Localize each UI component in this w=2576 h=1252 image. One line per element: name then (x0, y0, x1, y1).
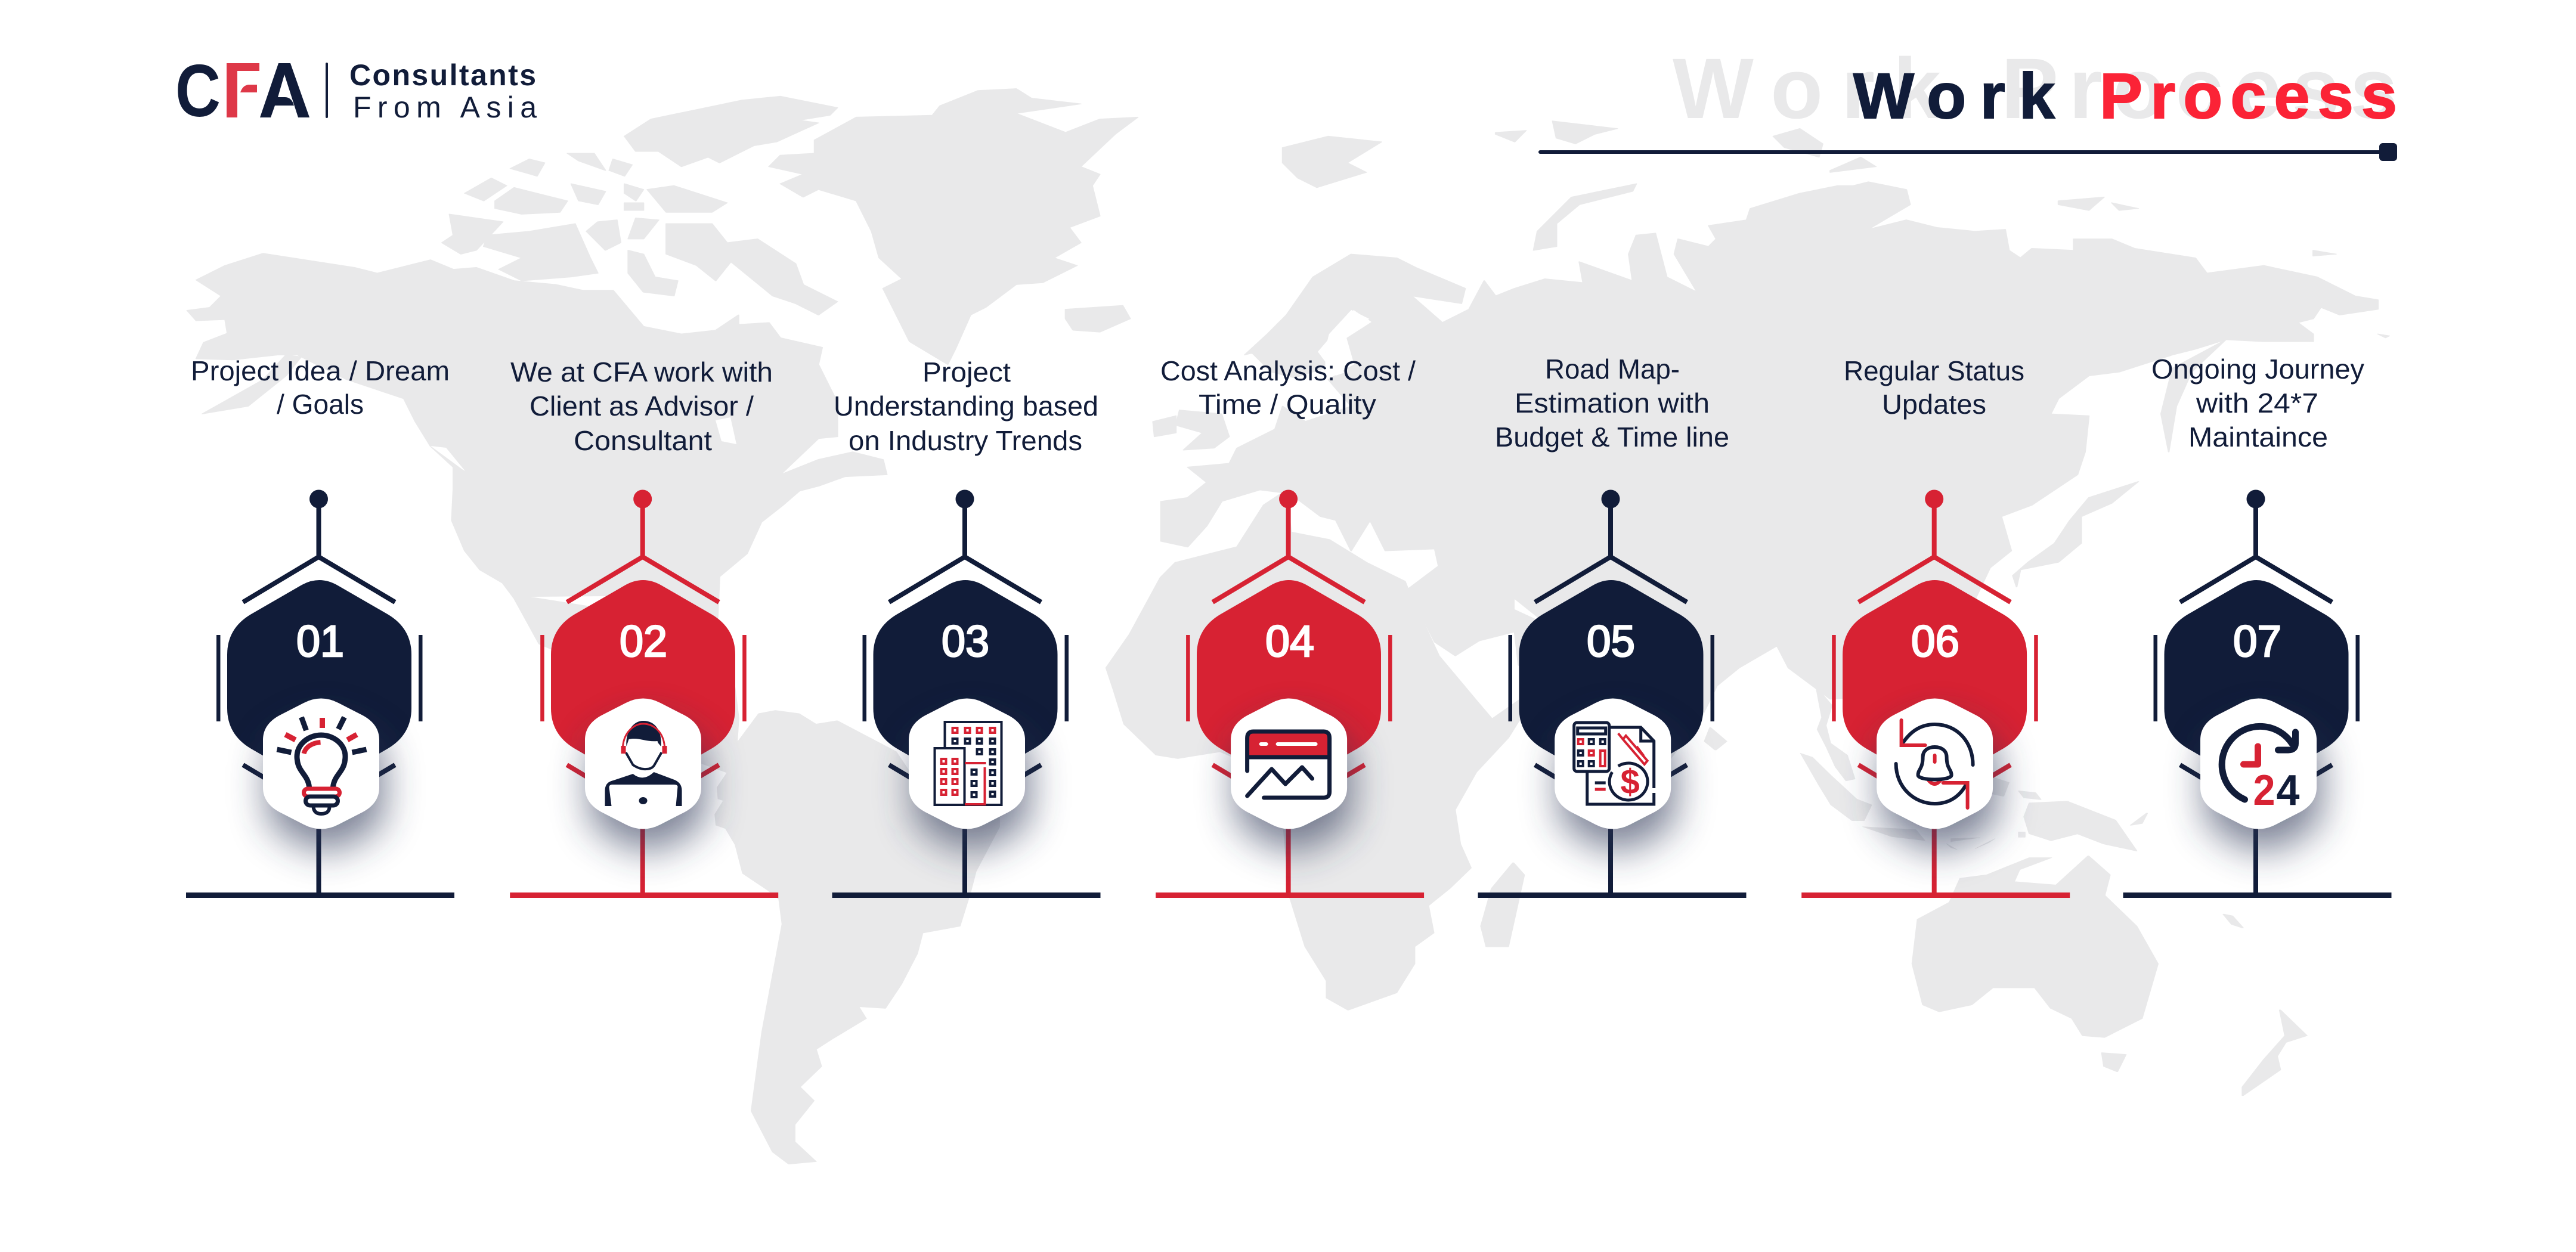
hexagon shadow 05 (1559, 720, 1676, 851)
caption 05: Road Map- (1545, 354, 1680, 385)
white icon hexagon 06 (1877, 699, 1993, 829)
caption 01: Project Idea / Dream (191, 355, 450, 386)
connector frame 07 (2123, 490, 2391, 898)
caption 01 (191, 355, 450, 420)
connector frame 06 (1801, 490, 2070, 898)
icon: calculator and budget sheet (1574, 723, 1654, 804)
hexagon shadow 07 (2205, 720, 2321, 851)
hexagon 06 (1843, 580, 2027, 783)
caption 03: Understanding based (834, 391, 1098, 422)
hexagon shadow 02 (590, 720, 706, 851)
logo wordmark CFA (175, 50, 309, 132)
hexagon shadow 04 (1236, 720, 1352, 851)
number 01: 01 (296, 616, 344, 666)
caption 01: / Goals (277, 389, 364, 420)
caption 02: We at CFA work with (510, 357, 773, 388)
icon: office buildings (935, 722, 1002, 805)
step 04 (1156, 355, 1424, 898)
logo: Consultants From Asia (175, 50, 537, 132)
step 07 (2123, 354, 2391, 898)
white icon hexagon 07 (2200, 699, 2317, 829)
caption 04 (1160, 355, 1416, 420)
hexagon shadow 06 (1881, 720, 1998, 851)
title ghost shadow text: Process (2001, 41, 2398, 137)
white icon hexagon 04 (1231, 699, 1347, 829)
connector frame 01 (186, 490, 454, 898)
caption 04: Time / Quality (1199, 389, 1376, 420)
caption 03: on Industry Trends (849, 425, 1082, 456)
number 04: 04 (1265, 616, 1314, 666)
white icon hexagon 03 (909, 699, 1025, 829)
number 02: 02 (620, 616, 667, 666)
caption 07: with 24*7 (2196, 388, 2318, 419)
title main text: Work (1853, 60, 2055, 132)
caption 03: Project (922, 357, 1011, 388)
title main text (1853, 60, 2397, 132)
icon: 24 hour clock: 4 (2277, 767, 2299, 814)
hexagon 02 (551, 580, 735, 783)
number 05: 05 (1587, 616, 1635, 666)
map water cut-outs (431, 310, 1544, 647)
caption 05: Estimation with (1515, 388, 1710, 419)
hexagon 01 (227, 580, 411, 783)
connector frame 05 (1478, 490, 1746, 898)
world map background (187, 89, 2389, 1164)
caption 07: Maintaince (2188, 422, 2328, 453)
connector frame 04 (1156, 490, 1424, 898)
hexagon 03 (873, 580, 1058, 783)
icon: 24 hour clock: 2 (2253, 767, 2275, 814)
icon: consultant with headset (605, 721, 682, 806)
icon: 24 hour clock (2222, 726, 2299, 814)
caption 02: Consultant (574, 425, 712, 456)
hexagon shadow 01 (268, 720, 384, 851)
caption 05 (1495, 354, 1729, 453)
white icon hexagon 01 (263, 699, 379, 829)
caption 05: Budget & Time line (1495, 422, 1729, 453)
hexagon 05 (1519, 580, 1703, 783)
caption 06: Regular Status (1844, 355, 2024, 386)
title ghost shadow text: Work (1673, 41, 1942, 137)
icon: analytics window (1247, 732, 1330, 798)
step 02 (510, 357, 778, 898)
hexagon 04 (1197, 580, 1381, 783)
hexagon 07 (2165, 580, 2348, 783)
step 06 (1801, 355, 2070, 898)
number 03: 03 (942, 616, 989, 666)
title main text: Process (2100, 60, 2397, 132)
hexagon shadow 03 (914, 720, 1030, 851)
title ghost shadow text (1673, 41, 2398, 137)
title underline with end cap (1538, 143, 2397, 161)
white icon hexagon 05 (1555, 699, 1671, 829)
caption 03 (834, 357, 1098, 456)
icon: notification bell with refresh arrows (1896, 720, 1973, 808)
caption 07: Ongoing Journey (2151, 354, 2364, 385)
step 01 (186, 355, 454, 898)
caption 06: Updates (1882, 389, 1986, 420)
caption 06 (1844, 355, 2024, 420)
connector frame 02 (510, 490, 778, 898)
logo text: Consultants: Consultants (349, 58, 536, 92)
icon: light bulb (277, 717, 366, 814)
white icon hexagon 02 (585, 699, 701, 829)
step 05 (1478, 354, 1746, 898)
title: Work Process (1673, 41, 2398, 137)
logo divider (326, 63, 328, 118)
number 07: 07 (2233, 616, 2281, 666)
step 03 (832, 357, 1101, 898)
icon: dollar sign: $ (1621, 763, 1640, 801)
number 06: 06 (1911, 616, 1959, 666)
logo wordmark CFA: C (175, 50, 221, 132)
caption 04: Cost Analysis: Cost / (1160, 355, 1416, 386)
connector frame 03 (832, 490, 1101, 898)
caption 07 (2151, 354, 2364, 453)
caption 02: Client as Advisor / (530, 391, 754, 422)
caption 02 (510, 357, 773, 456)
logo text: From Asia: From Asia (353, 91, 537, 124)
